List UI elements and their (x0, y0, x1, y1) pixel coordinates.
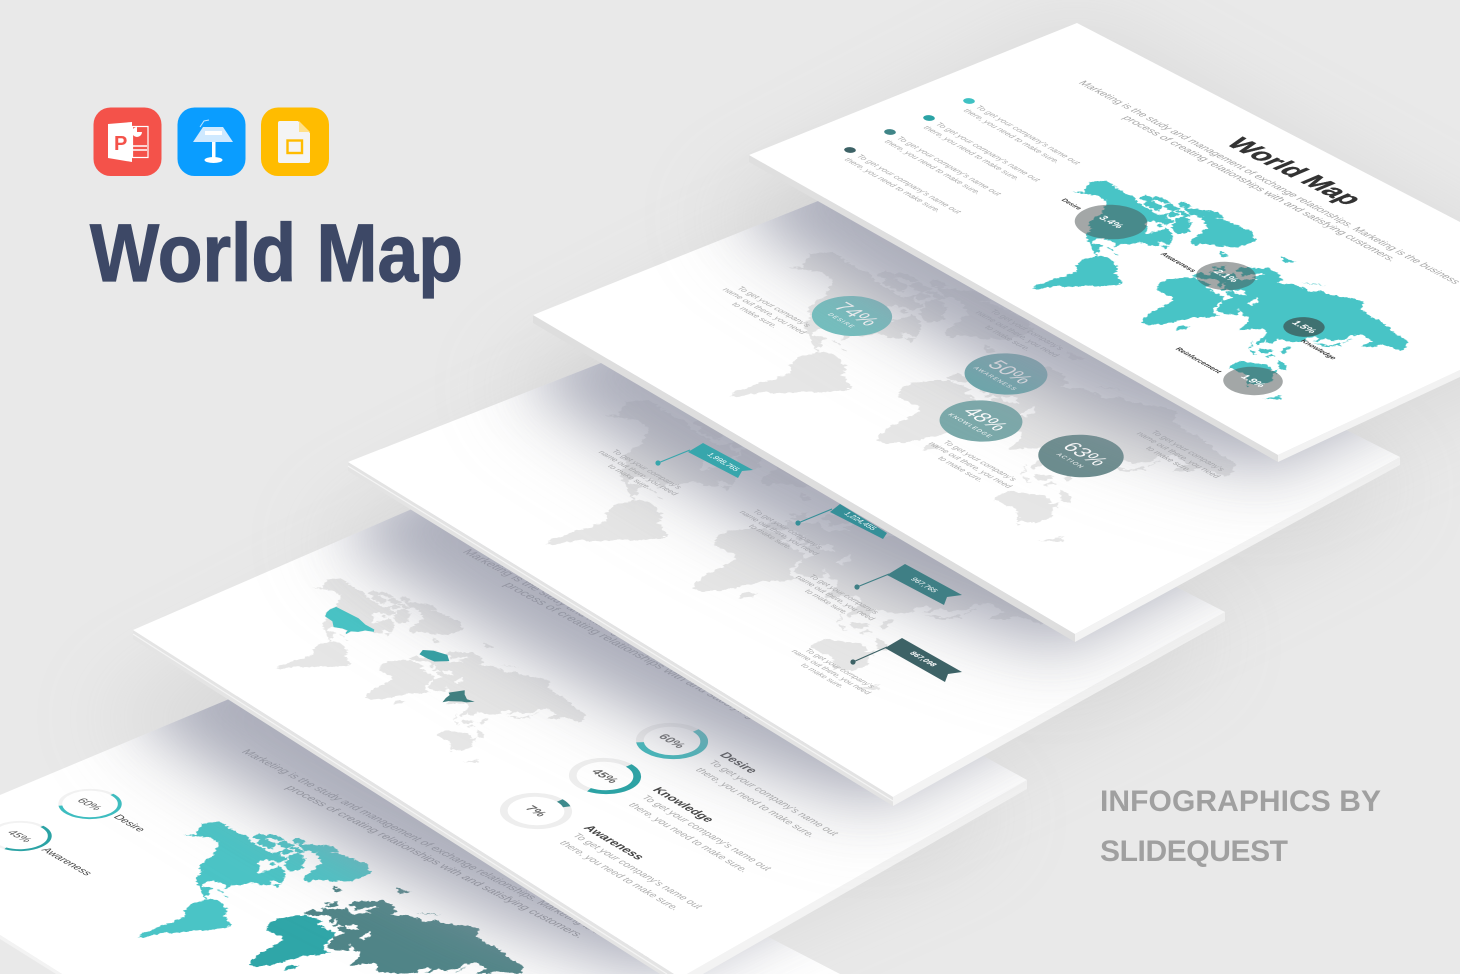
text block 3: name out there, you need (793, 575, 878, 621)
donut: 45% Awareness: 45% (4, 829, 34, 844)
text block 3: name out there, you need (926, 441, 1015, 489)
marker: 3.4% Desire (1060, 198, 1162, 246)
text block 2: To get your company's (988, 308, 1066, 351)
text block 2: To get your company's (750, 508, 825, 550)
bullet 4: To get your company's name out (854, 153, 964, 215)
flag: 867,098: 867,098 (907, 650, 940, 668)
description text line 2: process of creating relationships with and satisfying customers. (1119, 114, 1400, 263)
donut: 60% (626, 718, 718, 764)
flag: 1,998,765: 1,998,765 (705, 452, 742, 472)
bullet 2 (910, 114, 1044, 187)
text block 1: to make sure. (729, 301, 780, 329)
item: Awareness: there, you need to make sure. (556, 840, 682, 912)
map: grey world map (205, 566, 618, 771)
donut: 60% Desire (48, 784, 132, 824)
map: teal world map (944, 166, 1446, 409)
label: Awareness: Awareness (1158, 252, 1198, 273)
text block 1: To get your company's (735, 285, 813, 328)
icon: Google Slides (261, 108, 329, 176)
highlight: India (435, 688, 481, 709)
map: grey world map (428, 380, 1104, 703)
title: World Map (90, 208, 463, 299)
marker: 1.9% Reinforcement: 1.9% (1237, 374, 1268, 389)
text block 1: name out there, you need (596, 450, 681, 496)
description text: Marketing is the study and management of exchange relationships. Marketing is the business (1075, 79, 1460, 285)
bullet 1: To get your company's name out (973, 104, 1083, 166)
bubble: 50% Awareness: 50% (982, 358, 1038, 387)
bubble: 63% Action: ACTION (1054, 452, 1086, 469)
bubble: 63% Action (1021, 426, 1141, 486)
text block 2: to make sure. (746, 523, 795, 550)
bubble: 50% Awareness: AWARENESS (971, 366, 1019, 392)
text block 4: To get your company's (1149, 429, 1227, 472)
panel: slide with percentage bubbles (533, 185, 1400, 642)
icon: PowerPoint: P (114, 133, 127, 155)
flag: 967,765: 967,765 (908, 576, 940, 594)
bullet 3 (871, 128, 1005, 201)
marker: 1.5% Knowledge: 1.5% (1288, 320, 1319, 335)
text block 1: name out there, you need (720, 287, 809, 335)
bullet 1: there, you need to make sure. (961, 108, 1063, 164)
flag: 967,765 (854, 564, 962, 605)
donut: 60%: 60% (655, 732, 689, 750)
panel: bottom slide with large teal map (0, 712, 840, 974)
heading: World Map: World Map (1219, 134, 1371, 208)
bubble: 63% Action: 63% (1057, 440, 1113, 469)
bullet 3: there, you need to make sure. (882, 139, 984, 195)
text block 3: to make sure. (802, 588, 851, 615)
text block 3: To get your company's (806, 573, 881, 615)
highlight: Europe (416, 646, 455, 665)
donut: 7%: 7% (522, 804, 550, 818)
label: Desire: Desire (110, 813, 148, 833)
bubble: 48% Knowledge: 48% (957, 405, 1013, 434)
panel: top slide World Map (749, 23, 1460, 462)
label: Knowledge: Knowledge (1298, 339, 1338, 360)
marker: 2.1% Awareness (1184, 256, 1268, 296)
map: grey world map (612, 232, 1288, 555)
donut: 7% (490, 788, 582, 834)
marker: 1.5% Knowledge (1275, 313, 1333, 341)
bubble: 50% Awareness (947, 345, 1065, 403)
flag: 1,998,765 (655, 443, 753, 478)
text block 1: to make sure. (605, 463, 654, 490)
marker: 2.1% Awareness: 2.1% (1210, 269, 1241, 284)
item: Knowledge: Knowledge (649, 785, 718, 824)
flag: 1,224,455 (795, 504, 887, 539)
item: Awareness: To get your company's name out (569, 832, 705, 910)
marker: 3.4% Desire: 3.4% (1095, 215, 1126, 230)
item: Knowledge: there, you need to make sure. (625, 802, 751, 874)
map: teal world map (138, 821, 524, 974)
credit line 1: INFOGRAPHICS BY (1100, 785, 1381, 818)
donut: 45% Awareness (0, 816, 62, 856)
donut: 45%: 45% (588, 767, 622, 785)
bullet 2: there, you need to make sure. (921, 125, 1023, 181)
text block 2: name out there, you need (973, 310, 1062, 358)
text block 4: to make sure. (798, 662, 847, 689)
description text: Marketing is the study and management of exchange relationships. Marketing is the business (459, 547, 899, 784)
item: Knowledge: To get your company's name out (638, 794, 774, 872)
item: Awareness (552, 823, 721, 917)
text block 4: name out there, you need (1134, 431, 1223, 479)
icon: Keynote (178, 108, 246, 176)
bubble: 48% Knowledge: KNOWLEDGE (946, 413, 994, 439)
description text line 2: process of creating relationships with and satisfying customers. (282, 784, 587, 940)
item: Awareness: Awareness (580, 823, 648, 861)
text block 3: To get your company's (941, 439, 1019, 482)
bubble: 74% Desire: DESIRE (825, 312, 857, 329)
flag: 1,224,455: 1,224,455 (842, 511, 879, 531)
text block 1: To get your company's (609, 448, 684, 490)
bullet 4 (831, 146, 965, 219)
marker: 1.9% Reinforcement (1211, 361, 1295, 401)
icon: PowerPoint (94, 108, 162, 176)
highlight: USA (314, 607, 379, 639)
text block 4: name out there, you need (789, 649, 874, 695)
item: Desire (688, 750, 857, 844)
panel: slide with flags (348, 332, 1225, 806)
bubble: 74% Desire: 74% (828, 300, 884, 329)
item: Knowledge (621, 785, 790, 879)
bullet 4: there, you need to make sure. (842, 157, 944, 213)
panel: slide with highlighted countries and donuts (133, 479, 1027, 974)
label: Reinforcement: Reinforcement (1173, 347, 1224, 375)
description text line 2: process of creating relationships with and satisfying customers. (500, 580, 818, 751)
bullet 3: To get your company's name out (894, 135, 1004, 197)
item: Desire: Desire (716, 750, 761, 775)
bubble: 74% Desire (795, 288, 909, 344)
text block 2: name out there, you need (737, 510, 822, 556)
text block 4: to make sure. (1143, 445, 1194, 473)
item: Desire: there, you need to make sure. (692, 767, 818, 839)
label: Desire: Desire (1059, 198, 1083, 211)
label: Awareness: Awareness (38, 846, 95, 877)
description text: Marketing is the study and management of exchange relationships. Marketing is the business (238, 748, 656, 961)
credit line 2: SLIDEQUEST (1100, 835, 1288, 868)
text block 4: To get your company's (802, 647, 877, 689)
bullet 2: To get your company's name out (933, 121, 1043, 183)
text block 2: to make sure. (982, 324, 1033, 352)
text block 3: to make sure. (935, 455, 986, 483)
flag: 867,098 (850, 638, 962, 682)
donut: 45% (560, 753, 650, 799)
item: Desire: To get your company's name out (705, 759, 841, 837)
bubble: 48% Knowledge (922, 392, 1040, 450)
bullet 1 (950, 97, 1084, 170)
donut: 60% Desire: 60% (74, 797, 104, 812)
